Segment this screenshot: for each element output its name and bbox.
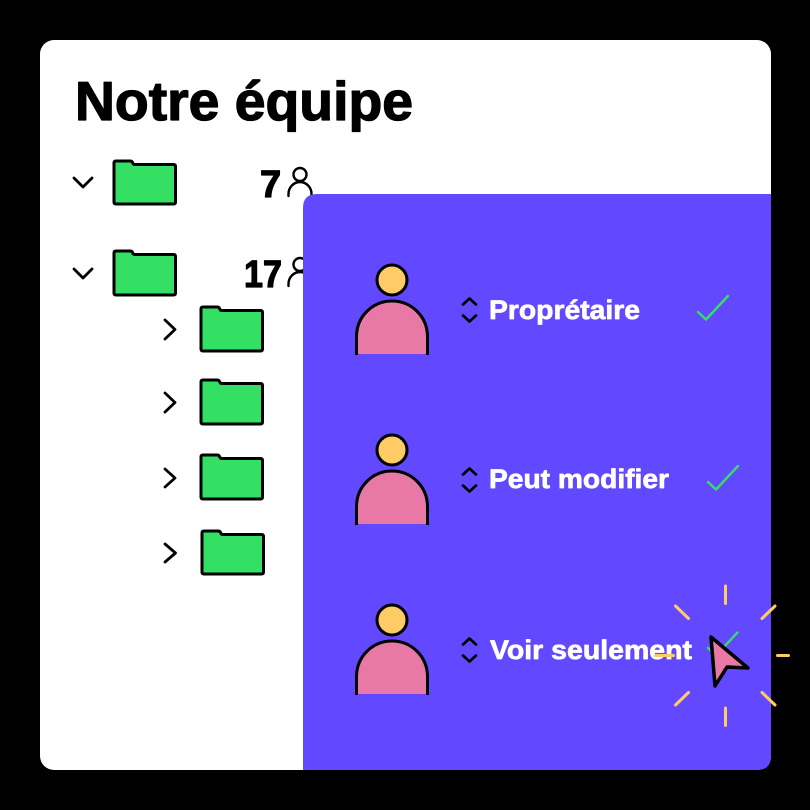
icon: person <box>356 265 428 355</box>
icon: chevron down <box>74 269 92 278</box>
icon: folder <box>114 161 176 204</box>
icon: up/down chevrons <box>463 638 476 662</box>
subfolder row 4 <box>165 531 264 574</box>
icon: chevron right <box>165 393 175 412</box>
icon: chevron down <box>74 178 92 187</box>
icon: cursor arrow <box>711 637 748 686</box>
icon: folder <box>201 455 262 499</box>
icon: person <box>356 435 428 525</box>
icon: check mark <box>708 466 738 490</box>
permission row: editor <box>356 435 738 525</box>
label: Peut modifier <box>489 464 670 494</box>
icon: check mark <box>698 296 728 320</box>
icon: person outline <box>288 168 312 196</box>
icon: up/down chevrons <box>463 298 476 322</box>
subfolder row 3 <box>165 455 262 499</box>
icon: click sparks <box>656 586 788 726</box>
title: Notre équipe <box>75 70 413 132</box>
icon: up/down chevrons <box>463 468 476 492</box>
icon: folder <box>201 380 262 424</box>
folder row 1 <box>74 161 312 206</box>
icon: person <box>356 605 428 695</box>
icon: folder <box>202 531 264 574</box>
permission row: view only <box>356 605 738 695</box>
member count: 17 <box>244 254 282 296</box>
icon: chevron right <box>165 544 176 562</box>
icon: chevron right <box>165 320 175 339</box>
label: Proprétaire <box>489 295 640 325</box>
icon: check mark <box>708 632 738 656</box>
label: Voir seulement <box>490 635 692 665</box>
icon: chevron right <box>165 469 175 487</box>
permission row: owner <box>356 265 728 355</box>
panel: purple permissions <box>303 194 771 770</box>
icon: folder <box>201 307 262 351</box>
member count: 7 <box>260 164 281 206</box>
folder row 2 <box>74 251 312 296</box>
icon: person outline <box>288 258 312 286</box>
subfolder row 2 <box>165 380 262 424</box>
subfolder row 1 <box>165 307 262 351</box>
icon: folder <box>114 251 176 295</box>
